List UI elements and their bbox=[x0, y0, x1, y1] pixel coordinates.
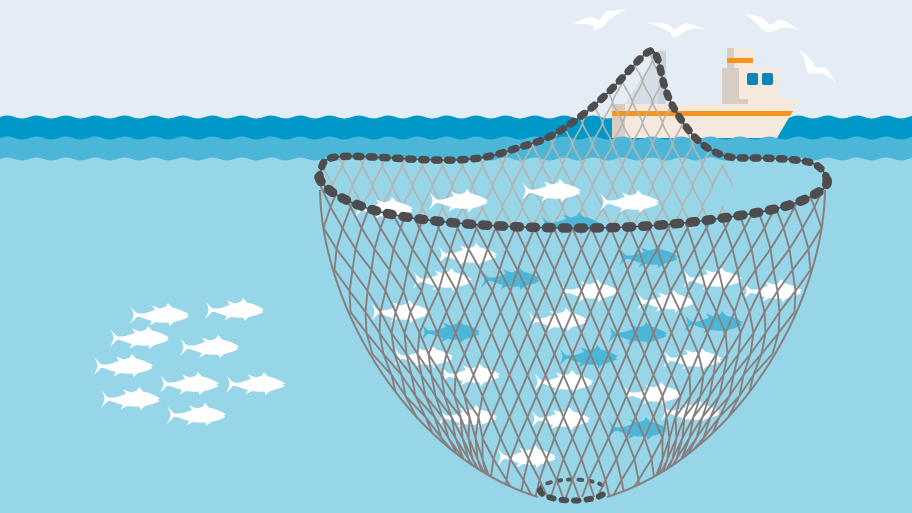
blue fish bbox=[541, 212, 600, 235]
bird 1 bbox=[572, 9, 627, 30]
fish bbox=[110, 326, 169, 349]
middle wave bbox=[0, 136, 912, 492]
bird 2 bbox=[647, 23, 706, 37]
net outer edge bbox=[320, 190, 825, 497]
bottom ring of the net, near side bbox=[540, 490, 606, 500]
bird 3 bbox=[745, 14, 800, 32]
boat cabin bbox=[722, 68, 780, 104]
fish bbox=[101, 387, 160, 410]
front mesh of the net bbox=[320, 165, 824, 501]
fish bbox=[226, 372, 285, 395]
fish bbox=[429, 189, 488, 212]
back wave bbox=[0, 116, 912, 471]
boat bbox=[612, 48, 800, 138]
float rope: far side and line to the boat bbox=[319, 51, 827, 180]
fish bbox=[180, 335, 239, 358]
white fish group bbox=[371, 243, 802, 468]
boat funnel bbox=[727, 48, 753, 70]
fish bbox=[160, 372, 219, 395]
fish bbox=[94, 354, 153, 377]
fish inside the rim bbox=[354, 179, 659, 235]
birds bbox=[572, 9, 836, 83]
fish bbox=[522, 179, 581, 202]
back mesh of the net, inside the rim bbox=[324, 54, 734, 225]
sky bbox=[0, 0, 912, 125]
school of fish outside the net bbox=[94, 298, 285, 426]
boat hull bbox=[612, 99, 800, 138]
boat mast and boom bbox=[625, 51, 666, 104]
fish bbox=[130, 303, 189, 326]
fish bbox=[354, 197, 413, 220]
blue fish group bbox=[421, 245, 743, 440]
bird 4 bbox=[799, 50, 836, 83]
sea bbox=[0, 158, 912, 513]
bottom ring of the net, far side bbox=[540, 480, 606, 490]
fish caught below the rim bbox=[371, 243, 802, 468]
float rope: near side bbox=[319, 177, 827, 228]
fish bbox=[600, 190, 659, 213]
fish bbox=[205, 298, 264, 321]
fish bbox=[167, 403, 226, 426]
boat windows bbox=[747, 73, 773, 85]
